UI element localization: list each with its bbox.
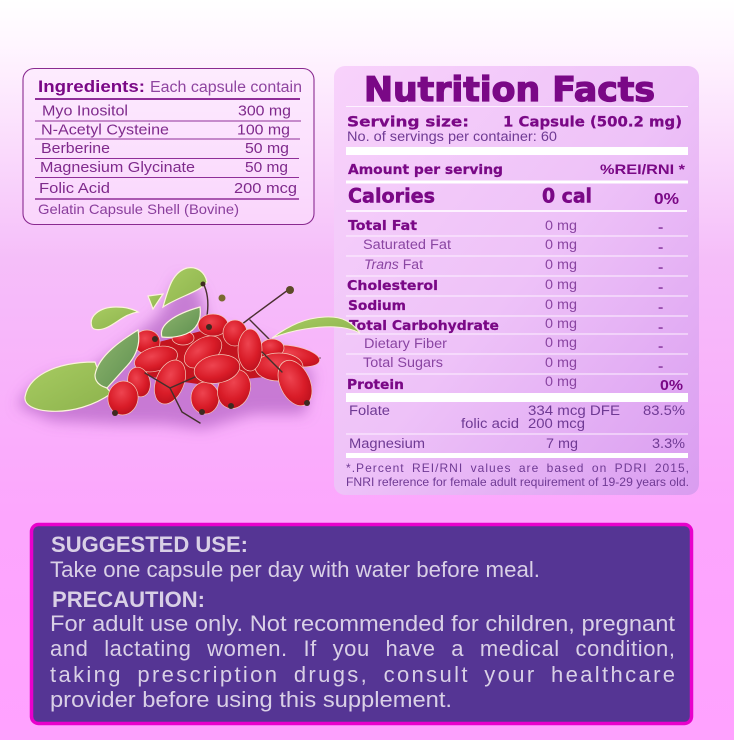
stems over berries [145, 352, 282, 423]
suggested use: Take one capsule per day with water before meal. [50, 557, 540, 582]
vitamins and minerals rows: 83.5% [643, 403, 685, 418]
vitamins and minerals rows: Folate [349, 403, 390, 418]
green leaf over berries [95, 307, 200, 388]
precaution: provider before using this supplement. [50, 687, 452, 712]
nutrient rows: 0 mg [545, 316, 577, 331]
ingredient rows: Berberine [41, 140, 110, 157]
ingredient rows: 50 mg [245, 140, 289, 157]
right leaf overlapping panel [272, 317, 360, 338]
nutrient rows: Total Carbohydrate [349, 318, 499, 334]
ingredient rows: N-Acetyl Cysteine [41, 122, 169, 138]
ingredients heading: Ingredients: [38, 78, 145, 96]
vitamins and minerals rows: 7 mg [546, 436, 578, 451]
nutrient rows: - [658, 338, 663, 355]
nutrient rows: - [658, 279, 663, 296]
footnote [346, 461, 689, 489]
nutrient rows: 0 mg [545, 237, 577, 252]
leaves [25, 268, 207, 411]
ingredient rows: 50 mg [245, 159, 288, 176]
nutrient rows: Protein [347, 377, 404, 393]
berry tips [112, 282, 310, 416]
nutrition facts title: Nutrition Facts [364, 70, 655, 110]
nutrient rows: 0 mg [545, 355, 577, 370]
nutrient rows: - [658, 259, 663, 276]
footnote: FNRI reference for female adult requirement of 19-29 years old. [346, 475, 689, 489]
calories row: 0% [654, 191, 679, 208]
nutrient rows: 0 mg [545, 335, 577, 350]
calories row: 0 cal [542, 184, 592, 208]
nutrient rows [347, 218, 683, 394]
ingredient rows: Magnesium Glycinate [40, 159, 195, 176]
ingredient rows: 200 mcg [234, 180, 297, 197]
panel: ingredients [23, 68, 314, 224]
nutrient rows: Cholesterol [347, 278, 438, 294]
illustration: barberry branch [18, 268, 360, 429]
amount per serving header [348, 161, 686, 178]
serving size [347, 114, 682, 144]
capsule shell note: Gelatin Capsule Shell (Bovine) [38, 201, 239, 217]
precaution: PRECAUTION: [52, 587, 205, 612]
ingredient rows: Folic Acid [39, 180, 110, 197]
panel: usage and precaution [32, 524, 692, 724]
nutrient rows: Trans Fat [364, 257, 423, 272]
precaution: taking prescription drugs, consult your healthcare [50, 662, 675, 687]
precaution: For adult use only. Not recommended for children, pregnant [50, 611, 675, 636]
serving size: No. of servings per container: 60 [347, 129, 557, 144]
nutrient rows: Total Sugars [363, 355, 443, 370]
vitamins and minerals rows: Magnesium [349, 436, 425, 451]
nutrient rows: 0 mg [545, 218, 577, 233]
nutrient rows: Dietary Fiber [364, 336, 448, 351]
amount per serving header: %REI/RNI * [600, 161, 686, 177]
serving size: Serving size: [347, 114, 469, 130]
precaution: and lactating women. If you have a medical condition, [50, 636, 675, 661]
calories row [348, 184, 679, 208]
serving size: 1 Capsule (500.2 mg) [503, 114, 682, 130]
suggested use: SUGGESTED USE: [51, 532, 248, 557]
ingredient rows [39, 102, 297, 197]
ingredient rows: 100 mg [237, 122, 290, 138]
panel: nutrition facts [334, 66, 699, 495]
nutrient rows: 0 mg [545, 374, 577, 389]
berries [105, 314, 321, 417]
ingredients heading: Each capsule contain [150, 79, 302, 96]
nutrient rows: 0% [660, 378, 683, 394]
nutrient rows: Saturated Fat [363, 237, 451, 252]
berry cluster backing [139, 328, 290, 385]
suggested use [50, 532, 540, 582]
stems behind berries [195, 283, 320, 366]
nutrient rows: - [658, 319, 663, 336]
vitamins and minerals rows: 3.3% [652, 436, 685, 451]
nutrient rows: - [658, 239, 663, 256]
nutrient rows: Sodium [348, 298, 406, 314]
nutrient rows: - [658, 299, 663, 316]
vitamins and minerals rows [349, 403, 685, 451]
vitamins and minerals rows: 334 mcg DFE [528, 403, 620, 418]
vitamins and minerals rows: folic acid [461, 416, 519, 431]
ingredients heading [38, 78, 302, 96]
calories row: Calories [348, 184, 435, 208]
nutrient rows: - [658, 358, 663, 375]
nutrient rows: Total Fat [348, 218, 418, 234]
amount per serving header: Amount per serving [348, 162, 503, 178]
ingredient rows: Myo Inositol [42, 102, 128, 120]
ingredient rows: 300 mg [238, 102, 291, 120]
nutrient rows: 0 mg [545, 297, 577, 312]
nutrient rows: 0 mg [545, 257, 577, 272]
nutrient rows: - [658, 219, 663, 236]
vitamins and minerals rows: 200 mcg [528, 416, 585, 431]
footnote: *.Percent REI/RNI values are based on PDRI 2015, [346, 461, 689, 475]
nutrient rows: 0 mg [545, 277, 577, 292]
precaution [50, 587, 675, 712]
